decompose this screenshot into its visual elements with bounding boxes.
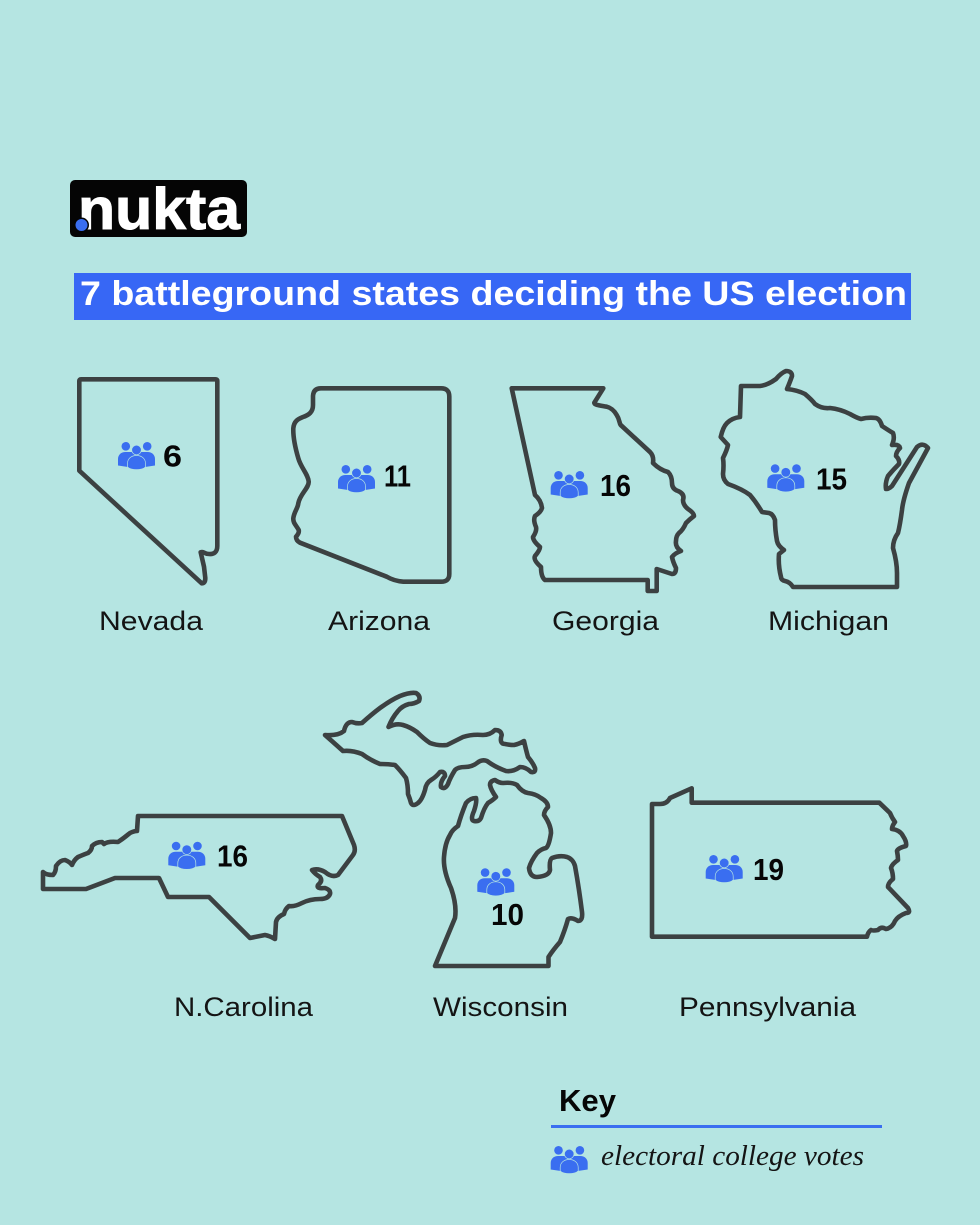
Pennsylvania vote count: 19: [753, 852, 784, 887]
icon: Nevada votes: [118, 442, 155, 470]
state: Arizona: [293, 388, 449, 636]
icon: electoral votes: [551, 1146, 588, 1174]
icon: Georgia votes: [551, 471, 588, 499]
upper peninsula: [325, 693, 535, 805]
N.Carolina label: N.Carolina: [174, 992, 314, 1022]
icon: Michigan votes: [767, 464, 804, 492]
icon: Wisconsin votes: [477, 868, 514, 896]
Pennsylvania label: Pennsylvania: [679, 992, 857, 1022]
key / legend: [551, 1083, 882, 1174]
Nevada label: Nevada: [99, 606, 204, 636]
state: N.Carolina: [43, 816, 355, 1022]
Georgia label: Georgia: [552, 606, 660, 636]
title: 7 battleground states deciding the US election: [80, 275, 907, 313]
lower peninsula: [435, 780, 582, 966]
Georgia vote count: 16: [600, 468, 631, 503]
N.Carolina vote count: 16: [217, 839, 248, 874]
Wisconsin label: Wisconsin: [433, 992, 568, 1022]
icon: Pennsylvania votes: [706, 855, 743, 883]
legend text: electoral college votes: [601, 1140, 864, 1172]
state: outline labelled Michigan: [721, 371, 928, 636]
state: Georgia: [512, 388, 694, 636]
Arizona vote count: 11: [384, 459, 411, 494]
icon: N.Carolina votes: [168, 842, 205, 869]
Wisconsin vote count: 10: [491, 897, 524, 932]
Michigan vote count: 15: [816, 461, 847, 496]
logo: nukta: nukta: [78, 177, 241, 242]
Nevada vote count: 6: [163, 439, 182, 474]
state: Nevada: [79, 379, 217, 636]
state: Pennsylvania: [652, 788, 909, 1022]
key / legend: Key: [559, 1083, 617, 1118]
Michigan label: Michigan: [768, 606, 889, 636]
Arizona label: Arizona: [328, 606, 431, 636]
icon: Arizona votes: [338, 465, 375, 493]
state: outline labelled Wisconsin: [325, 693, 582, 1022]
